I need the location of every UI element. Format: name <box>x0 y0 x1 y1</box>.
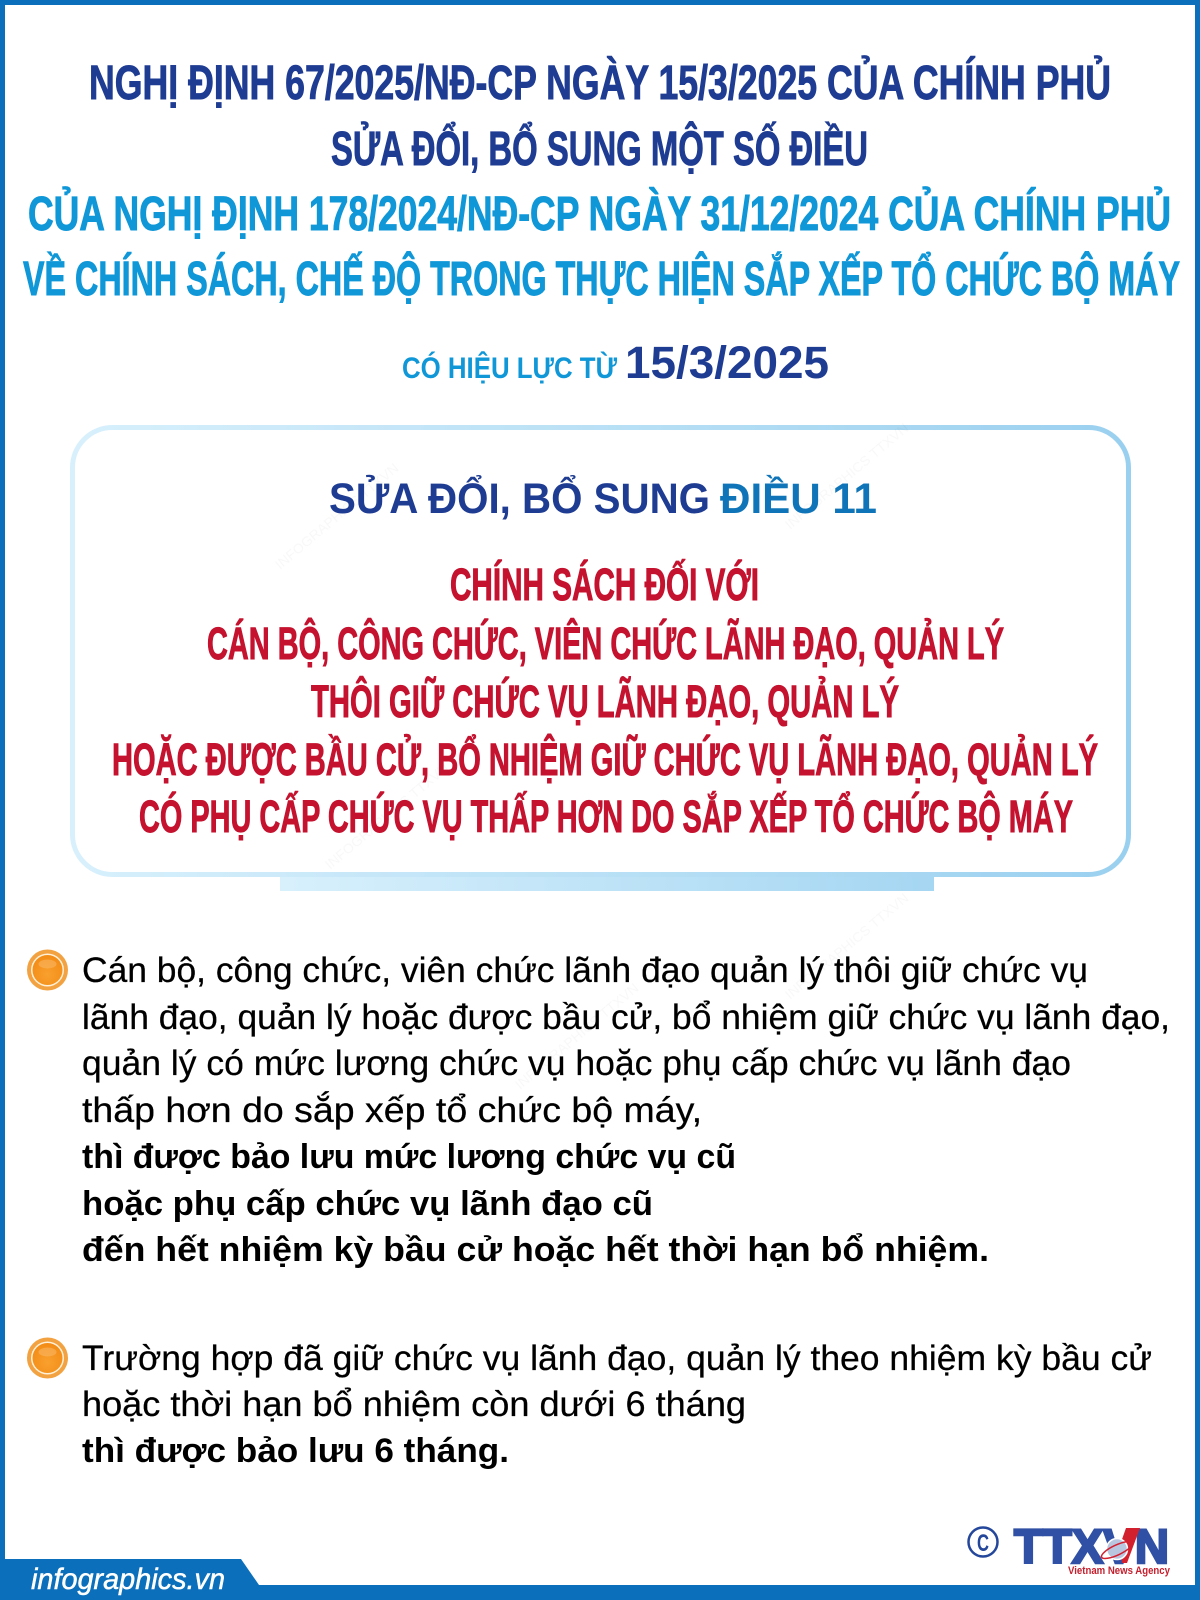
bullet 2 text: hoặc thời hạn bổ nhiệm còn dưới 6 tháng <box>82 1384 746 1424</box>
bullet 1 text <box>82 950 1170 1269</box>
footer tab: infographics.vn: infographics.vn <box>31 1563 225 1596</box>
watermarks: INFOGRAPHICS TTXVN <box>782 420 912 532</box>
title block: SỬA ĐỔI, BỔ SUNG MỘT SỐ ĐIỀU <box>331 121 868 176</box>
logo: TTXVN: Vietnam News Agency <box>1068 1565 1171 1577</box>
footer tab: infographics.vn <box>0 1559 259 1600</box>
effective date <box>402 337 829 388</box>
panel: article 11 <box>72 420 1128 1092</box>
bullet 2 text <box>82 1338 1152 1470</box>
logo: TTXVN: TTXVN <box>1014 1521 1169 1574</box>
panel red subtitle <box>112 559 1098 842</box>
bullet 2 <box>27 1338 1152 1470</box>
bullet 1 text: hoặc phụ cấp chức vụ lãnh đạo cũ <box>82 1185 653 1223</box>
watermarks <box>272 420 912 1092</box>
icon: copyright <box>968 1528 998 1557</box>
bullet 1 text: Cán bộ, công chức, viên chức lãnh đạo quản lý thôi giữ chức vụ <box>82 950 1088 990</box>
effective date: 15/3/2025 <box>625 337 829 388</box>
bullet 1 text: thì được bảo lưu mức lương chức vụ cũ <box>82 1138 736 1176</box>
effective date: CÓ HIỆU LỰC TỪ <box>402 351 617 385</box>
watermarks: INFOGRAPHICS TTXVN <box>512 980 642 1092</box>
icon: orange bullet <box>27 950 68 990</box>
panel heading: ĐIỀU 11 <box>720 475 877 523</box>
bullet 1 text: quản lý có mức lương chức vụ hoặc phụ cấp chức vụ lãnh đạo <box>82 1043 1071 1083</box>
panel red subtitle: THÔI GIỮ CHỨC VỤ LÃNH ĐẠO, QUẢN LÝ <box>311 676 899 727</box>
watermarks: INFOGRAPHICS TTXVN <box>272 460 402 572</box>
bullet 1 <box>27 950 1170 1269</box>
watermarks: INFOGRAPHICS TTXVN <box>322 760 452 872</box>
watermarks: INFOGRAPHICS TTXVN <box>782 890 912 1002</box>
icon: copyright: C <box>977 1530 989 1557</box>
bullet 2 text: Trường hợp đã giữ chức vụ lãnh đạo, quản lý theo nhiệm kỳ bầu cử <box>82 1338 1152 1378</box>
icon: orange bullet <box>27 1338 68 1378</box>
panel heading: SỬA ĐỔI, BỔ SUNG <box>329 473 710 523</box>
bullet 1 text: thấp hơn do sắp xếp tổ chức bộ máy, <box>82 1090 702 1130</box>
bullet 1 text: lãnh đạo, quản lý hoặc được bầu cử, bổ nhiệm giữ chức vụ lãnh đạo, <box>82 997 1170 1037</box>
bullet 2 text: thì được bảo lưu 6 tháng. <box>82 1432 509 1470</box>
bullet 1 text: đến hết nhiệm kỳ bầu cử hoặc hết thời hạn bổ nhiệm. <box>82 1231 989 1269</box>
icon: globe <box>1099 1528 1140 1563</box>
panel red subtitle: CHÍNH SÁCH ĐỐI VỚI <box>450 559 759 610</box>
title block <box>23 55 1180 306</box>
